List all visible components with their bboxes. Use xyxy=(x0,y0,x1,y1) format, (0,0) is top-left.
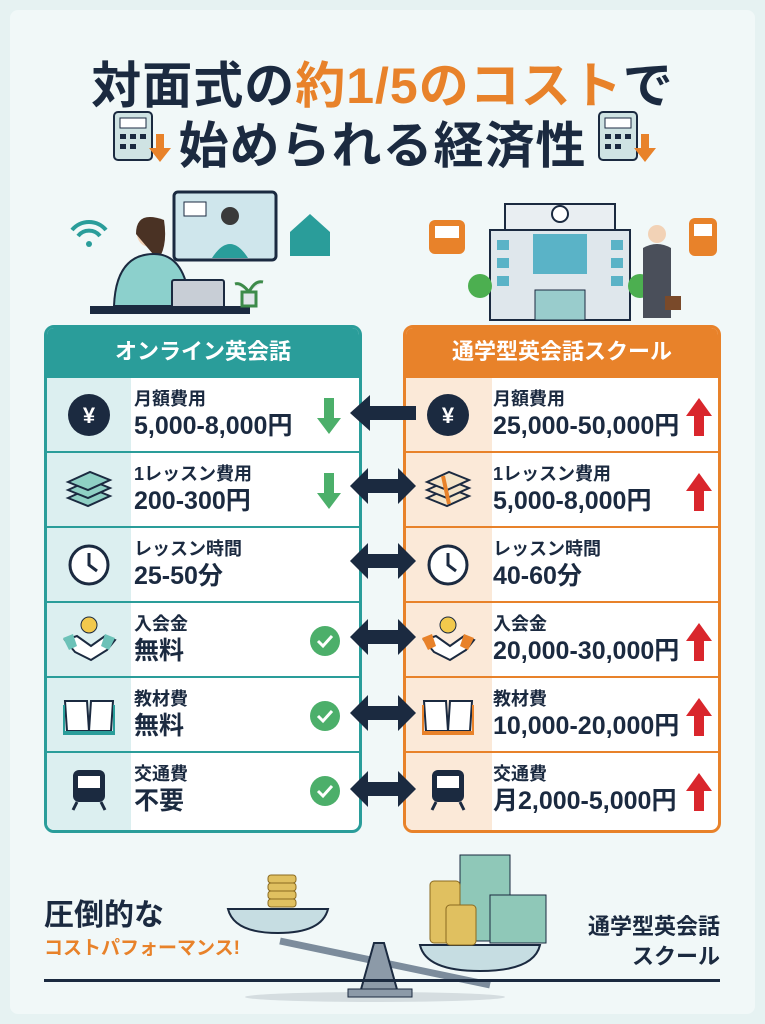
row: transport: 月2,000-5,000円 xyxy=(493,787,676,815)
arrow: entry fee xyxy=(350,619,416,655)
row: time: 25-50分 xyxy=(134,562,223,590)
row: lesson fee: 1レッスン費用 xyxy=(493,464,611,484)
row: materials: 教材費 xyxy=(134,689,188,709)
row: monthly xyxy=(406,376,718,451)
row: entry fee: 20,000-30,000円 xyxy=(493,637,679,665)
row: entry fee xyxy=(406,601,718,676)
row: time: 40-60分 xyxy=(493,562,582,590)
row: time: レッスン時間 xyxy=(134,539,242,559)
icon: calculator left xyxy=(113,111,171,162)
row: monthly: ¥ xyxy=(442,402,455,428)
panel: online xyxy=(44,325,362,833)
illustration: online learner xyxy=(70,190,330,314)
row: transport: 交通費 xyxy=(134,764,188,784)
row: monthly xyxy=(47,376,359,451)
row: materials xyxy=(406,676,718,751)
title: 対面式の約1/5のコストで xyxy=(91,58,674,114)
row: materials xyxy=(47,676,359,751)
icon: calculator right xyxy=(598,111,656,162)
row: time xyxy=(47,526,359,601)
row: transport: 交通費 xyxy=(493,764,547,784)
panel: online: オンライン英会話 xyxy=(115,339,291,364)
row: lesson fee xyxy=(47,451,359,526)
row: monthly: 5,000-8,000円 xyxy=(134,412,292,440)
text: cost performance xyxy=(44,899,240,959)
row: lesson fee xyxy=(406,451,718,526)
row: monthly: 25,000-50,000円 xyxy=(493,412,679,440)
text: school label: スクール xyxy=(632,944,720,969)
row: lesson fee: 200-300円 xyxy=(134,487,251,515)
illustration: school building xyxy=(429,203,717,321)
arrow: lesson fee xyxy=(350,468,416,504)
arrow: transport xyxy=(350,771,416,807)
illustration: balance scale xyxy=(226,854,546,1002)
text: cost performance: 圧倒的な xyxy=(44,899,164,932)
row: materials: 教材費 xyxy=(493,689,547,709)
row: transport xyxy=(47,751,359,826)
text: cost performance: コストパフォーマンス! xyxy=(44,938,240,959)
title: 始められる経済性 xyxy=(178,118,586,174)
arrow: materials xyxy=(350,695,416,731)
row: entry fee: 無料 xyxy=(134,637,184,665)
row: monthly: ¥ xyxy=(83,402,96,428)
row: time: レッスン時間 xyxy=(493,539,601,559)
row: monthly: 月額費用 xyxy=(134,389,206,409)
row: time xyxy=(406,526,718,601)
arrow: time xyxy=(350,543,416,579)
title xyxy=(91,58,674,174)
row: transport xyxy=(406,751,718,826)
row: materials: 10,000-20,000円 xyxy=(493,712,679,740)
row: entry fee: 入会金 xyxy=(134,614,188,634)
row: monthly: 月額費用 xyxy=(493,389,565,409)
row: lesson fee: 5,000-8,000円 xyxy=(493,487,651,515)
row: entry fee: 入会金 xyxy=(493,614,547,634)
text: school label: 通学型英会話 xyxy=(588,914,720,939)
row: entry fee xyxy=(47,601,359,676)
row: lesson fee: 1レッスン費用 xyxy=(134,464,252,484)
row: transport: 不要 xyxy=(134,787,184,815)
panel: school: 通学型英会話スクール xyxy=(452,339,672,364)
row: materials: 無料 xyxy=(134,712,184,740)
panel: school xyxy=(403,325,721,833)
text: school label xyxy=(588,914,720,969)
arrow: monthly (left) xyxy=(350,395,416,431)
